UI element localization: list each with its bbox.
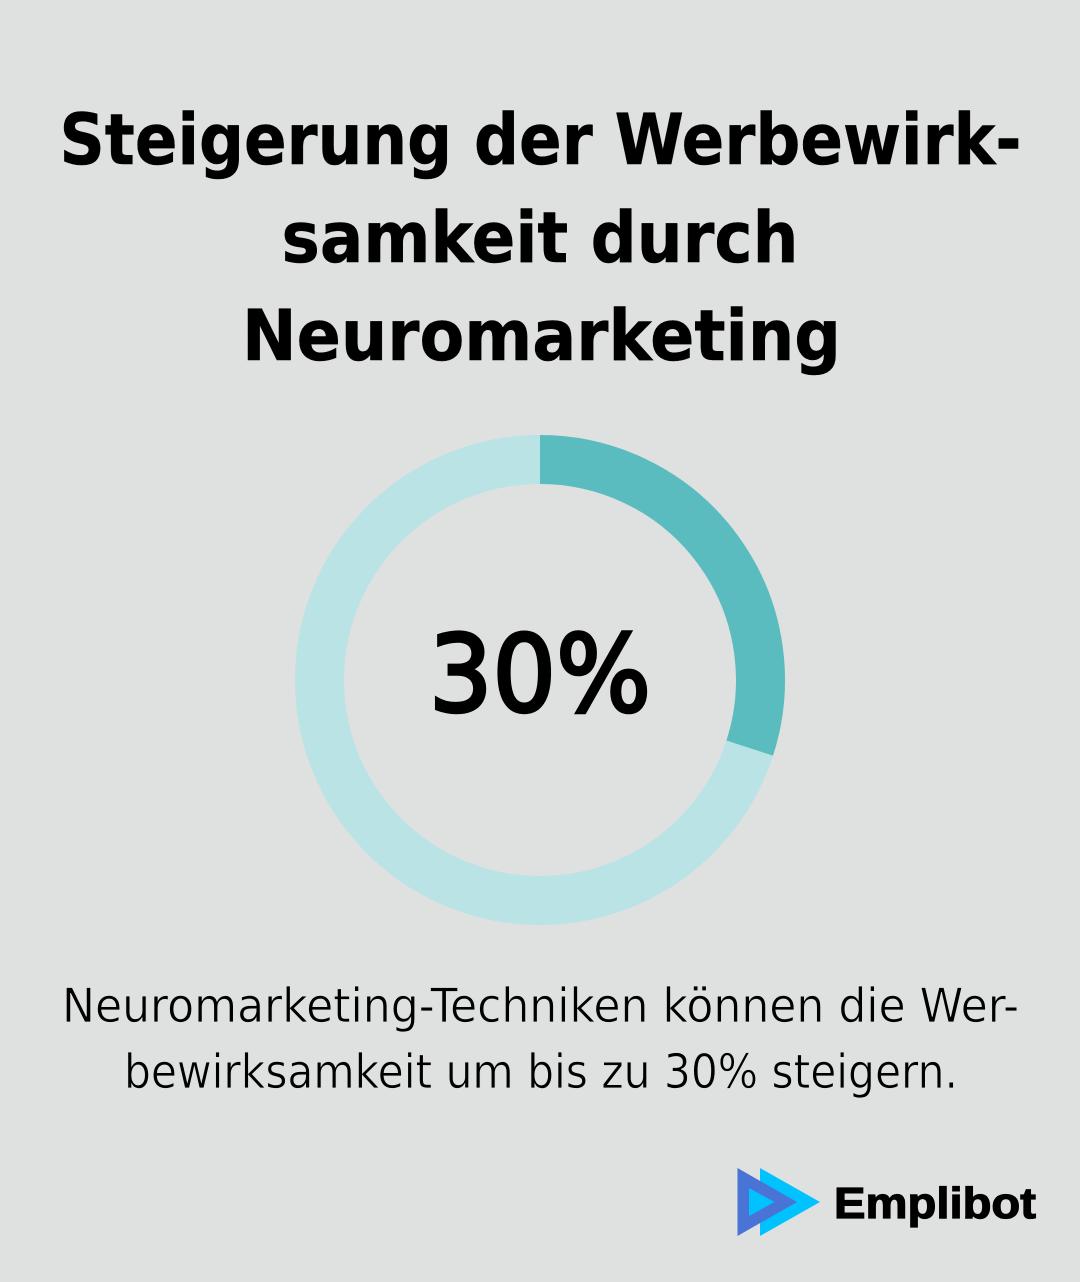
description text: Neuromarketing-Techniken können die Wer- xyxy=(62,979,1019,1034)
description text: bewirksamkeit um bis zu 30% steigern. xyxy=(124,1045,958,1100)
logo: Emplibot xyxy=(738,1168,1036,1236)
title xyxy=(60,99,1022,377)
title: Neuromarketing xyxy=(242,295,841,377)
donut centre value: 30% xyxy=(429,613,651,736)
title: samkeit durch xyxy=(282,197,798,279)
donut chart: 30% xyxy=(320,460,760,900)
logo wordmark: Emplibot xyxy=(834,1179,1036,1228)
icon: play triangles xyxy=(738,1168,820,1236)
description text xyxy=(62,979,1019,1100)
